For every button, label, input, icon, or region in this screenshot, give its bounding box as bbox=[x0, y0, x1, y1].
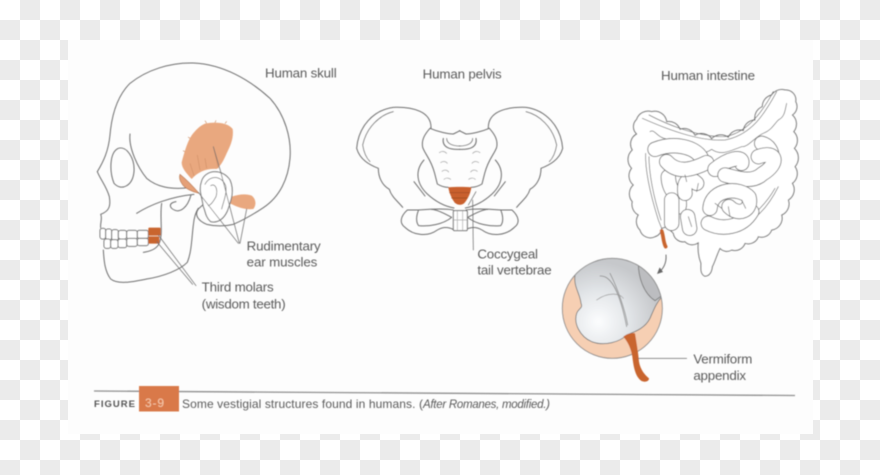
icon: ear bbox=[200, 172, 232, 222]
panel: human intestine bbox=[562, 68, 798, 383]
leader line: coccyx bbox=[468, 192, 476, 250]
label: rudimentary ear muscles: Rudimentary bbox=[247, 238, 321, 253]
label: coccygeal tail vertebrae: tail vertebrae bbox=[477, 262, 552, 277]
label: third molars: (wisdom teeth) bbox=[202, 296, 286, 311]
icon: vermiform appendix bbox=[623, 333, 649, 382]
panel: human pelvis bbox=[357, 66, 563, 277]
icon: ear muscle front bbox=[179, 174, 199, 193]
caption text: Some vestigial structures found in humans. ( bbox=[182, 397, 423, 411]
caption rule bbox=[94, 391, 795, 396]
small intestine bbox=[655, 143, 774, 228]
cecum bbox=[575, 257, 665, 344]
label: human intestine: Human intestine bbox=[661, 68, 755, 83]
label: third molars: Third molars bbox=[202, 280, 274, 295]
pubic symphysis bbox=[453, 211, 467, 231]
panel: figure page bbox=[68, 40, 813, 434]
figure number box bbox=[139, 386, 179, 412]
label: human pelvis: Human pelvis bbox=[423, 66, 502, 81]
leader line: appendix bbox=[638, 357, 687, 359]
large intestine bbox=[628, 90, 798, 276]
label: rudimentary ear muscles: ear muscles bbox=[247, 254, 318, 269]
label: vermiform appendix: appendix bbox=[693, 368, 746, 383]
figure label: FIGURE bbox=[94, 399, 135, 410]
teeth bbox=[100, 228, 148, 248]
label: human skull: Human skull bbox=[265, 65, 337, 80]
inset: appendix magnified bbox=[562, 257, 665, 358]
shaded colon fold bbox=[638, 266, 661, 302]
pelvis left half bbox=[357, 107, 460, 235]
icon: third molars bbox=[148, 228, 161, 244]
icon: small appendix bbox=[662, 231, 666, 247]
skull outline bbox=[97, 63, 290, 282]
label: coccygeal tail vertebrae: Coccygeal bbox=[477, 246, 538, 261]
icon: coccyx bbox=[448, 187, 471, 205]
figure number box: 3-9 bbox=[145, 396, 164, 410]
icon: ear muscle upper bbox=[182, 120, 233, 179]
caption source: After Romanes, modified.) bbox=[422, 399, 550, 411]
arrow to inset bbox=[657, 255, 666, 274]
icon: ear muscle rear bbox=[230, 194, 255, 209]
pelvis right half bbox=[459, 107, 563, 235]
leader lines: skull bbox=[157, 147, 247, 286]
figure artwork bbox=[94, 63, 798, 412]
panel: human skull bbox=[97, 63, 337, 311]
label: vermiform appendix: Vermiform bbox=[693, 351, 752, 366]
